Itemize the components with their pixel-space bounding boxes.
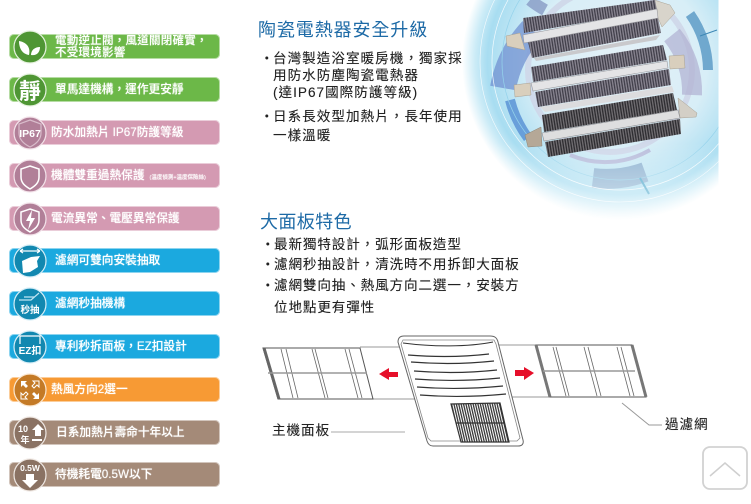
feature bar: single motor <box>9 77 220 102</box>
arrow: filter pulled right <box>515 367 534 380</box>
feature bar: quick-pull filter <box>9 291 220 316</box>
feature bar: ten-year heater life: 日系加熱片壽命十年以上 <box>56 426 185 438</box>
right filter <box>536 345 646 397</box>
arrow: filter pulled left <box>379 368 398 380</box>
leader line: main panel <box>331 431 405 433</box>
text block: ceramic heater bullets <box>260 51 463 143</box>
filter rails <box>360 345 550 399</box>
feature bar: EZ panel: EZ扣 <box>19 344 41 357</box>
label: filter: 過濾網 <box>665 417 708 432</box>
illustration: ceramic heater elements on blue circle <box>464 0 718 214</box>
text block: ceramic heater bullets: 日系長效型加熱片，長年使用 <box>273 109 463 124</box>
feature bar: standby power: 0.5W <box>20 463 41 473</box>
feature bar: check valve: 電動逆止閥，風道關閉確實， <box>55 35 208 47</box>
text block: ceramic heater bullets: (達IP67國際防護等級) <box>273 85 418 100</box>
text block: large panel bullets: ・ <box>261 278 275 293</box>
feature bar: current and voltage protection <box>9 206 220 230</box>
text block: ceramic heater bullets: ・ <box>260 51 274 66</box>
text block: large panel bullets: 濾網秒抽設計，清洗時不用拆卸大面板 <box>274 257 520 272</box>
feature bar: EZ panel <box>9 334 220 359</box>
leader line: filter <box>622 403 662 425</box>
feature bar: standby power: 待機耗電0.5W以下 <box>55 468 152 481</box>
feature bar: hot air direction <box>9 377 220 402</box>
icon: back-to-top button <box>703 447 747 489</box>
feature bar: IP67: IP67 <box>19 128 41 140</box>
text block: large panel bullets: 最新獨特設計，弧形面板造型 <box>274 237 462 252</box>
text block: large panel bullets: ・ <box>261 257 275 272</box>
feature bar: ten-year heater life: 年 <box>20 434 30 444</box>
text block: ceramic heater bullets: 台灣製造浴室暖房機，獨家採 <box>273 51 463 66</box>
feature bar: EZ panel: 專利秒拆面板，EZ扣設計 <box>55 340 187 353</box>
label: main panel: 主機面板 <box>272 423 330 438</box>
text block: ceramic heater bullets: ・ <box>260 109 274 124</box>
text block: ceramic heater bullets: 用防水防塵陶瓷電熱器 <box>273 68 419 83</box>
feature bar: standby power <box>9 462 220 487</box>
text block: large panel bullets: 位地點更有彈性 <box>274 300 375 315</box>
text block: large panel bullets: 濾網雙向抽、熱風方向二選一，安裝方 <box>274 278 520 293</box>
heater unit 3 <box>525 93 697 157</box>
feature bar: check valve <box>9 34 220 59</box>
heater unit 1 <box>506 0 675 61</box>
left filter <box>263 348 373 399</box>
feature bar: IP67 <box>9 120 220 145</box>
feature bar: double overheat protection <box>9 163 220 188</box>
text block: ceramic heater bullets: 一樣溫暖 <box>273 128 331 143</box>
text block: large panel bullets: ・ <box>261 237 275 252</box>
feature bar: quick-pull filter: 濾網秒抽機構 <box>55 297 125 310</box>
main panel <box>398 336 523 446</box>
heading: ceramic heater upgrade: 陶瓷電熱器安全升級 <box>258 20 428 40</box>
heading: large panel features: 大面板特色 <box>260 212 352 232</box>
feature bar: current and voltage protection: 電流異常、電壓異常保護 <box>51 212 180 224</box>
text block: large panel bullets <box>261 237 520 315</box>
feature bar: check valve: 不受環境影響 <box>55 46 126 58</box>
feature bar: two-way filter <box>9 248 220 273</box>
feature bar: hot air direction: 熱風方向2選一 <box>51 383 128 396</box>
feature bar: IP67: 防水加熱片 IP67防護等級 <box>51 126 183 139</box>
feature bar: single motor: 靜 <box>19 79 41 104</box>
heater unit 2 <box>514 45 685 112</box>
feature bar: two-way filter: 濾網可雙向安裝抽取 <box>55 254 160 267</box>
feature bar: quick-pull filter: 秒抽 <box>20 304 40 316</box>
feature bar: ten-year heater life <box>9 420 220 444</box>
feature bar: ten-year heater life: 10 <box>18 424 28 434</box>
feature bar: double overheat protection: 機體雙重過熱保護 (溫度偵測+溫度保險絲) <box>51 169 206 182</box>
feature bar: single motor: 單馬達機構，運作更安靜 <box>55 83 184 96</box>
